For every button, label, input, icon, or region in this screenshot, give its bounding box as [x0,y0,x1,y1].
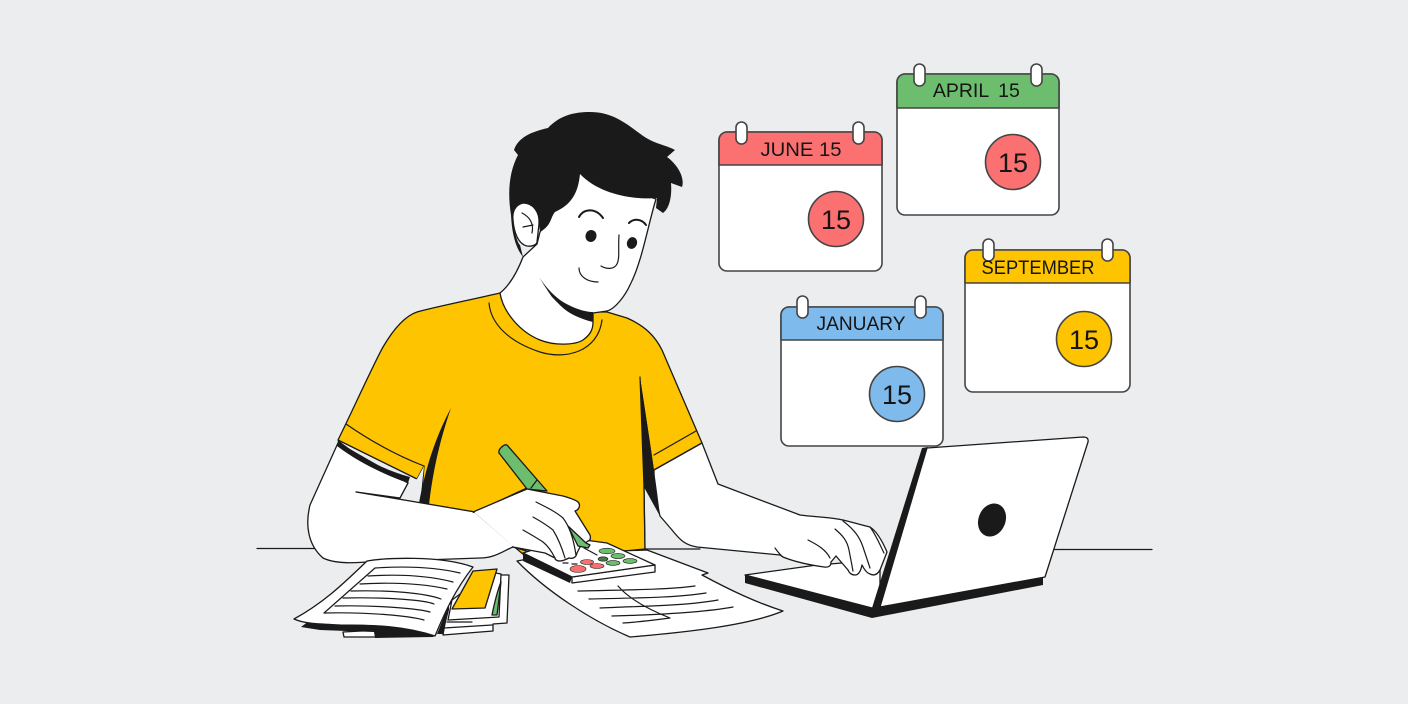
calendar: June 15 [719,122,882,271]
laptop keyboard base [745,560,880,608]
black shadow [301,621,437,638]
laptop lid [880,437,1088,607]
calendar: September [965,239,1130,392]
right arm [640,377,887,575]
calendar: September: SEPTEMBER [982,257,1094,279]
eyes [584,228,598,244]
t-shirt [338,293,702,560]
ear [513,203,539,246]
laptop logo [973,499,1011,541]
pen tip [568,526,590,548]
person at desk [294,112,1088,638]
shirt shadow folds [419,408,451,505]
eyebrows [579,210,646,225]
calendar: April 15 [897,64,1059,215]
sleeve hems [346,424,696,466]
calendar: June 15: 15 [821,205,851,235]
calendar: September: 15 [1069,325,1099,355]
calendar: April 15: 15 [998,148,1028,178]
calendar: January: JANUARY [816,313,906,335]
laptop [745,437,1088,618]
calendar: January: 15 [882,380,912,410]
top page [294,558,473,636]
collar [489,303,602,355]
calendar: June 15: JUNE 15 [760,139,842,161]
writing hand [400,489,597,561]
calculator [523,538,655,583]
green sheet [492,582,501,615]
neck and face [500,112,683,344]
calendar: April 15: APRIL [933,80,989,102]
hair [509,112,683,257]
back pages [443,575,509,635]
left arm [308,440,590,563]
calendar: April 15: 15 [998,80,1020,102]
right document [517,550,783,637]
calculator keys [570,548,637,572]
laptop spine [872,447,928,608]
green pen [499,445,547,491]
yellow sheet [452,569,497,609]
nose and mouth [579,235,619,282]
laptop base edge [745,575,1043,618]
calendar: January [781,296,943,446]
neck shadow [539,277,593,322]
left document stack [294,558,509,638]
